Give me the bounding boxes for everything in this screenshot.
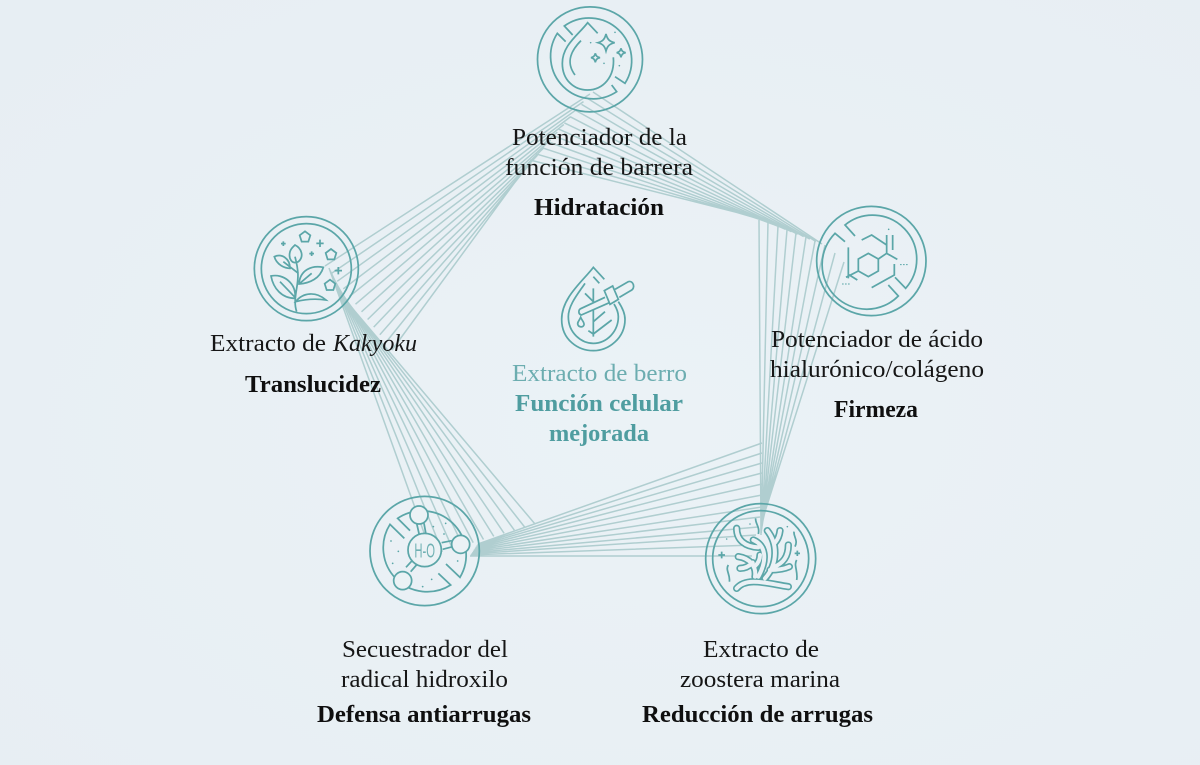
text block: Hidratación: Potenciador de la bbox=[512, 125, 687, 151]
center text: Extracto de berro bbox=[512, 361, 687, 447]
text block: Firmeza: Firmeza bbox=[834, 397, 918, 423]
text block: Translucidez bbox=[210, 331, 417, 398]
text block: Firmeza: hialurónico/colágeno bbox=[770, 357, 984, 383]
text block: Firmeza: Potenciador de ácido bbox=[771, 327, 983, 353]
icon: hydration drop with sparkles bbox=[537, 7, 642, 112]
center text: Extracto de berro: mejorada bbox=[549, 421, 649, 447]
text block: Defensa antiarrugas: radical hidroxilo bbox=[341, 667, 508, 693]
text block: Hidratación: Hidratación bbox=[534, 195, 664, 221]
icon: kakyoku plant with flowers bbox=[254, 217, 358, 321]
icon: hydroxyl radical H2O atoms bbox=[370, 496, 479, 606]
text block: Reducción de arrugas: Extracto de bbox=[703, 637, 819, 663]
icon: central drop with dropper and cress leaf bbox=[562, 267, 634, 351]
text block: Hidratación bbox=[505, 125, 693, 221]
text block: Firmeza bbox=[770, 327, 984, 423]
text block: Defensa antiarrugas: Defensa antiarrugas bbox=[317, 702, 531, 728]
label: H-O formula: H-O bbox=[414, 539, 435, 562]
center text: Extracto de berro: Función celular bbox=[515, 391, 683, 417]
text block: Translucidez: Translucidez bbox=[245, 372, 381, 398]
text block: Reducción de arrugas: zoostera marina bbox=[680, 667, 840, 693]
text block: Translucidez: Extracto de bbox=[210, 331, 326, 357]
text block: Translucidez: Kakyoku bbox=[332, 331, 417, 357]
text block: Defensa antiarrugas: Secuestrador del bbox=[342, 637, 508, 663]
text block: Hidratación: función de barrera bbox=[505, 155, 693, 181]
text block: Reducción de arrugas bbox=[642, 637, 873, 728]
icon: collagen molecule bbox=[817, 206, 926, 316]
text block: Reducción de arrugas: Reducción de arrugas bbox=[642, 702, 873, 728]
text block: Defensa antiarrugas bbox=[317, 637, 531, 728]
center text: Extracto de berro: Extracto de berro bbox=[512, 361, 687, 387]
string-art pentagon connecting the five ingredients bbox=[325, 92, 844, 556]
icon: marine zostera coral bbox=[706, 504, 816, 614]
